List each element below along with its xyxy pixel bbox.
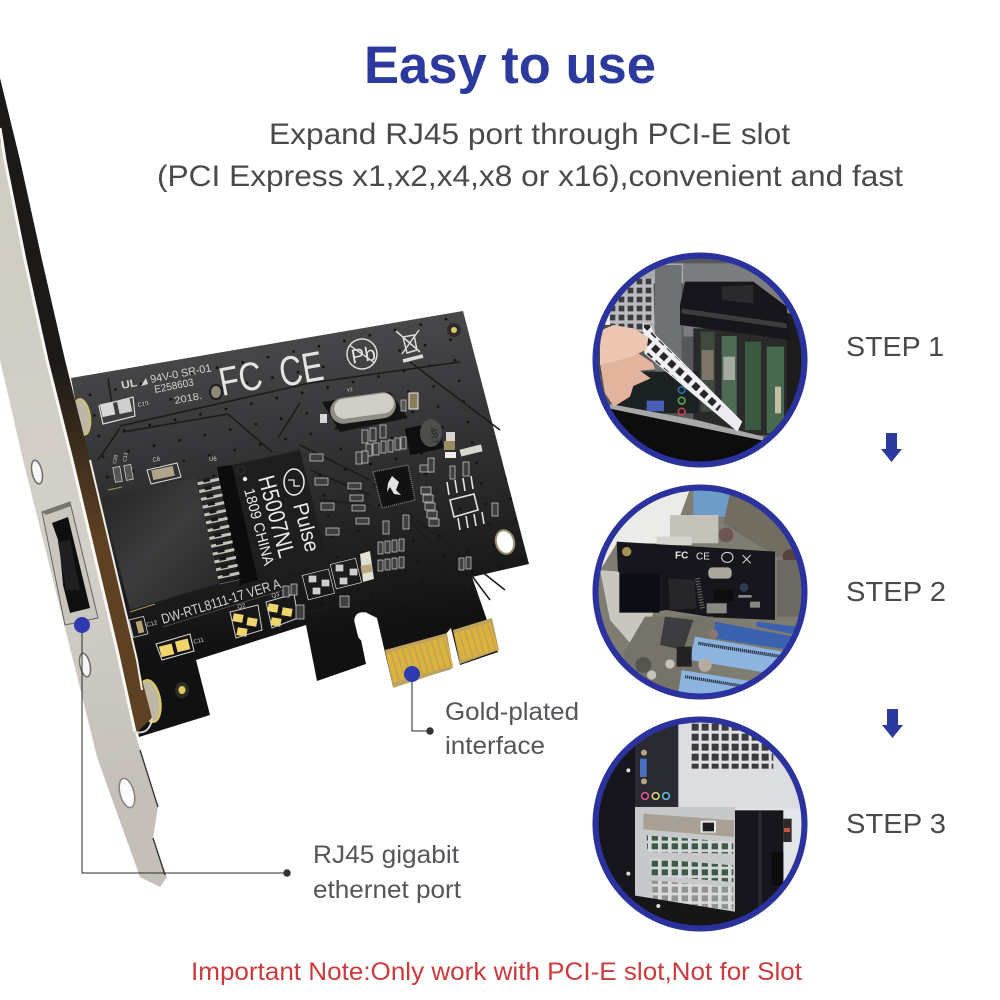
retention clip xyxy=(735,810,783,920)
title: Easy to use xyxy=(364,36,656,95)
certification marks: Q2 xyxy=(237,603,247,611)
step 2 photo: FC xyxy=(675,550,688,561)
I/O shield xyxy=(635,722,678,809)
certification marks: U6 xyxy=(209,457,217,463)
black retention clip xyxy=(680,282,790,340)
gold-plated fingers xyxy=(385,618,499,688)
step 3 photo xyxy=(590,712,810,937)
circuit board xyxy=(0,78,529,887)
certification marks: C20 xyxy=(112,454,120,464)
RJ45 port xyxy=(42,502,98,625)
callout: gold-plated interface: Gold-plated xyxy=(445,698,579,726)
subtitle xyxy=(157,118,904,193)
edge finger slot xyxy=(353,611,375,643)
certification marks: 94V-0 SR-01 xyxy=(149,362,212,386)
certification marks: Q3 xyxy=(271,592,281,600)
certification marks: CE xyxy=(275,342,327,396)
brass screws xyxy=(72,398,92,436)
crystal xyxy=(322,392,408,432)
recycling bin mark xyxy=(396,330,423,361)
circuit board: 1809 CHINA xyxy=(240,487,277,567)
surface components: 4R7 xyxy=(428,427,441,445)
motherboard xyxy=(624,616,714,691)
certification marks: FC xyxy=(215,353,266,405)
arrow: step 2 to step 3 xyxy=(882,709,903,738)
step 1 photo xyxy=(590,250,810,475)
case bottom xyxy=(611,408,764,462)
certification marks: C12 xyxy=(146,620,159,629)
step 2 photo: CE xyxy=(696,551,710,562)
network controller chip xyxy=(373,465,415,508)
step 2 photo xyxy=(590,480,810,705)
step 3 label: STEP 3 xyxy=(846,808,946,839)
circuit board: Pulse xyxy=(288,500,323,555)
hand: thumb xyxy=(600,325,648,365)
inductor xyxy=(405,422,444,455)
certification marks: C10 xyxy=(137,401,150,409)
certification marks: E258603 xyxy=(153,377,195,396)
callout: RJ45 port: RJ45 gigabit xyxy=(313,841,459,869)
step 2 label: STEP 2 xyxy=(846,576,946,607)
certification marks: Pb xyxy=(350,343,378,369)
certification marks: 2018. xyxy=(173,391,203,407)
small components cluster xyxy=(283,425,498,619)
bracket holes xyxy=(30,459,44,485)
inserted card xyxy=(617,542,775,620)
I/O panel xyxy=(613,372,698,413)
callout: gold-plated interface: interface xyxy=(445,732,545,760)
bracket face xyxy=(0,140,167,887)
chip shield xyxy=(102,478,220,610)
transformer pins xyxy=(217,465,258,585)
hand: fingers xyxy=(600,350,655,407)
blue slots xyxy=(713,622,793,650)
subtitle: (PCI Express x1,x2,x4,x8 or x16),convenient and fast xyxy=(157,160,904,193)
arrow: step 1 to step 2 xyxy=(881,433,902,462)
expansion slots xyxy=(635,807,735,914)
certification marks: DW-RTL8111-17 VER A xyxy=(159,575,283,627)
transformer chip xyxy=(232,450,328,580)
circuit board: H5007NL xyxy=(253,473,300,560)
important note: Important Note:Only work with PCI-E slot,Not for Slot xyxy=(191,958,802,986)
traces xyxy=(98,362,505,615)
certification marks xyxy=(112,330,423,646)
callout: gold-plated interface xyxy=(404,666,579,760)
callout: RJ45 port: ethernet port xyxy=(313,876,461,904)
certification marks: C13 xyxy=(122,452,130,462)
metal bracket xyxy=(0,78,167,887)
surface components xyxy=(99,391,498,660)
gold pads xyxy=(159,603,293,657)
certification marks: Y2 xyxy=(346,387,354,394)
PCI bracket cover xyxy=(643,324,742,431)
small IC xyxy=(447,476,484,530)
callout: RJ45 port xyxy=(74,617,461,904)
certification marks: C6 xyxy=(152,456,162,464)
certification marks: C11 xyxy=(193,637,205,646)
vent grid xyxy=(690,722,773,769)
bracket fold xyxy=(0,78,152,733)
subtitle: Expand RJ45 port through PCI-E slot xyxy=(269,118,791,151)
mounting holes xyxy=(72,323,517,723)
step 1 label: STEP 1 xyxy=(846,331,944,362)
certification marks: UL xyxy=(120,377,139,392)
slot area xyxy=(693,328,787,435)
